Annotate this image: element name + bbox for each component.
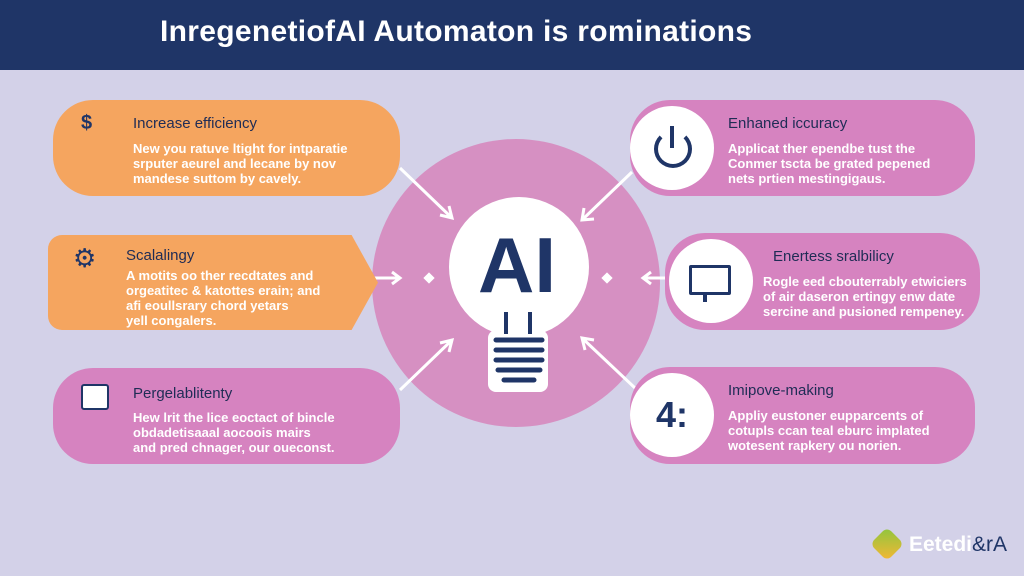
arrows (372, 168, 665, 390)
AI bulb: AI (478, 221, 556, 309)
panel: enhanced accuracy: nets prtien mestingigaus. (728, 171, 885, 186)
icon: gauge (630, 106, 714, 190)
panel: scalalingy: afi eoullsrary chord yetars (126, 298, 289, 313)
panel: enertess sralbilicy: Enertess sralbilicy (773, 248, 894, 265)
panel: enertess sralbilicy: of air daseron ertingy enw date (763, 289, 955, 304)
logo (872, 530, 1007, 558)
panel: pergelablitenty (53, 368, 400, 464)
header (0, 0, 1024, 70)
panel: scalalingy: yell congalers. (126, 313, 216, 328)
header: InregenetiofAI Automaton is rominations (160, 15, 752, 48)
panel: enertess sralbilicy (665, 233, 980, 330)
panel: scalalingy: Scalalingy (126, 247, 194, 264)
panel: enertess sralbilicy: Rogle eed cbouterrably etwiciers (763, 274, 967, 289)
AI bulb (449, 197, 589, 392)
panel: improve-making: Imipove-making (728, 382, 834, 399)
panel: scalalingy: A motits oo ther recdtates and (126, 268, 313, 283)
panel: increase efficiency (53, 100, 400, 196)
panel: increase efficiency: Increase efficiency (133, 115, 257, 132)
big circle (372, 139, 660, 427)
panel: pergelablitenty: obdadetisaaal aocoois mairs (133, 425, 311, 440)
icon: number 4: 4: (656, 394, 688, 435)
panel: scalalingy: orgeatitec & katottes erain; and (126, 283, 320, 298)
panel: scalalingy (48, 235, 378, 330)
panel: improve-making: cotupls ccan teal eburc implated (728, 423, 930, 438)
icon: gear: ⚙ (73, 243, 96, 273)
panel: increase efficiency: New you ratuve ltight for intparatie (133, 141, 348, 156)
icon: dollar: $ (81, 112, 92, 134)
panel: enhanced accuracy: Conmer tscta be grated pepened (728, 156, 930, 171)
icon: hand (81, 384, 109, 410)
panel: pergelablitenty: and pred chnager, our oueconst. (133, 440, 335, 455)
panel: enhanced accuracy: Enhaned iccuracy (728, 115, 847, 132)
panel: pergelablitenty: Pergelablitenty (133, 385, 232, 402)
panel: improve-making (630, 367, 975, 464)
panel: pergelablitenty: Hew lrit the lice eoctact of bincle (133, 410, 335, 425)
panel: enertess sralbilicy: sercine and pusioned rempeney. (763, 304, 964, 319)
panel: enhanced accuracy (630, 100, 975, 196)
logo: Eetedi&rA (909, 533, 1007, 556)
panel: improve-making: Appliy eustoner eupparcents of (728, 408, 923, 423)
panel: increase efficiency: srputer aeurel and lecane by nov (133, 156, 336, 171)
icon: number 4 (630, 373, 714, 457)
panel: increase efficiency: mandese suttom by cavely. (133, 171, 301, 186)
panel: enhanced accuracy: Applicat ther ependbe tust the (728, 141, 915, 156)
panel: improve-making: wotesent rapkery ou norien. (728, 438, 901, 453)
icon: monitor (669, 239, 753, 323)
